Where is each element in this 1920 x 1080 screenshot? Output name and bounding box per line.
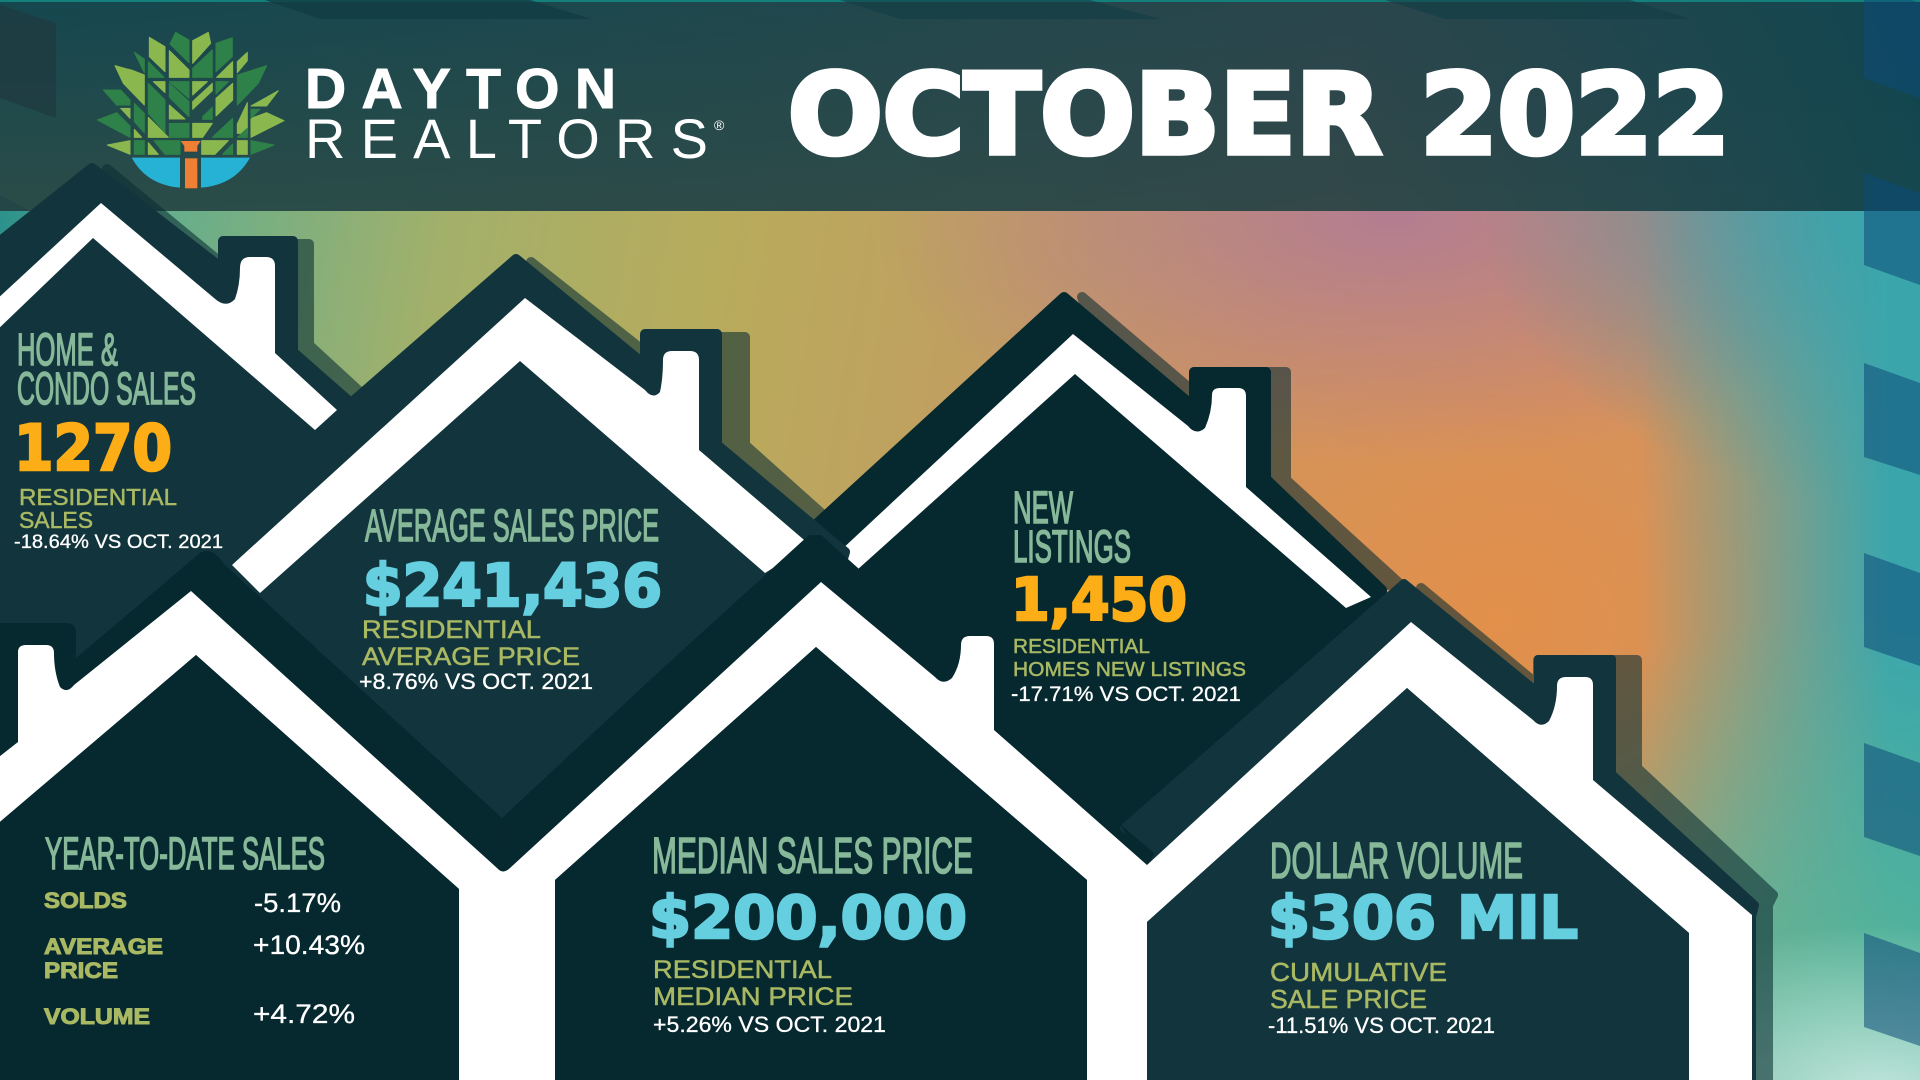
house: new listings [800, 297, 1382, 1000]
stat: year to date sales: VOLUME [44, 1004, 150, 1029]
stat: new listings: HOMES NEW LISTINGS [1013, 659, 1246, 681]
stat: dollar volume: CUMULATIVE [1270, 957, 1447, 987]
stat: home and condo sales [14, 324, 223, 553]
stat: new listings: NEW [1013, 482, 1073, 533]
logo: tree [97, 32, 284, 188]
stat: dollar volume: $306 MIL [1268, 883, 1578, 952]
house: home and condo sales [0, 168, 400, 1080]
stat: new listings [1011, 482, 1246, 706]
stat: year to date sales [44, 828, 365, 1029]
logo: wordmark: ® [714, 117, 725, 133]
stat: median sales price [649, 827, 973, 1037]
stat: median sales price: RESIDENTIAL [653, 956, 832, 984]
house: median sales price outline [502, 535, 1154, 1080]
title: OCTOBER 2022 [788, 51, 1730, 180]
stat: median sales price: MEDIAN PRICE [653, 983, 853, 1011]
stat: new listings: LISTINGS [1013, 521, 1131, 572]
stat: year to date sales: +10.43% [253, 930, 365, 960]
stat: new listings: RESIDENTIAL [1013, 636, 1150, 658]
stat: year to date sales: SOLDS [44, 888, 127, 913]
logo: wordmark: DAYTON [305, 57, 616, 121]
stat: home and condo sales: 1270 [14, 412, 172, 485]
stat: average sales price: RESIDENTIAL [362, 616, 541, 644]
logo: wordmark [305, 57, 725, 170]
stat: average sales price: AVERAGE PRICE [362, 643, 580, 671]
house: average sales price [232, 259, 845, 840]
stat: average sales price: $241,436 [363, 551, 662, 620]
stat: average sales price: +8.76% VS OCT. 2021 [359, 669, 593, 694]
house fill: dollar volume [1147, 688, 1689, 1080]
stat: average sales price: AVERAGE SALES PRICE [365, 500, 659, 551]
stat: median sales price: $200,000 [649, 883, 967, 952]
stat: dollar volume [1268, 832, 1578, 1038]
stat: home and condo sales: CONDO SALES [17, 363, 196, 414]
stat: dollar volume: -11.51% VS OCT. 2021 [1268, 1013, 1495, 1038]
house fill: year to date [0, 655, 459, 1080]
stat: home and condo sales: RESIDENTIAL [19, 484, 177, 510]
stat: new listings: 1,450 [1011, 565, 1187, 634]
stat: home and condo sales: HOME & [17, 324, 118, 375]
stat: year to date sales: PRICE [44, 958, 118, 983]
stat: dollar volume: DOLLAR VOLUME [1270, 832, 1523, 889]
stat: year to date sales: +4.72% [253, 999, 355, 1029]
stat: year to date sales: AVERAGE [44, 934, 163, 959]
house white frames, lower row [0, 582, 1752, 1080]
stat: new listings: -17.71% VS OCT. 2021 [1011, 683, 1241, 706]
house: year to date sales outline [0, 551, 510, 1080]
stat: year to date sales: YEAR-TO-DATE SALES [45, 828, 325, 879]
house: dollar volume [1124, 583, 1755, 1080]
stat: home and condo sales: SALES [19, 507, 93, 533]
stat: home and condo sales: -18.64% VS OCT. 2021 [14, 532, 223, 553]
stat: year to date sales: -5.17% [254, 888, 341, 918]
stat: median sales price: +5.26% VS OCT. 2021 [653, 1012, 886, 1037]
house fill: median [555, 647, 1087, 1080]
stat: dollar volume: SALE PRICE [1270, 984, 1427, 1014]
logo: wordmark: REALTORS [305, 107, 708, 170]
roof shadows [107, 169, 1773, 1080]
stat: median sales price: MEDIAN SALES PRICE [652, 827, 973, 884]
stat: average sales price [359, 500, 662, 694]
right side stripes [1864, 0, 1920, 1046]
header band [0, 0, 1920, 225]
